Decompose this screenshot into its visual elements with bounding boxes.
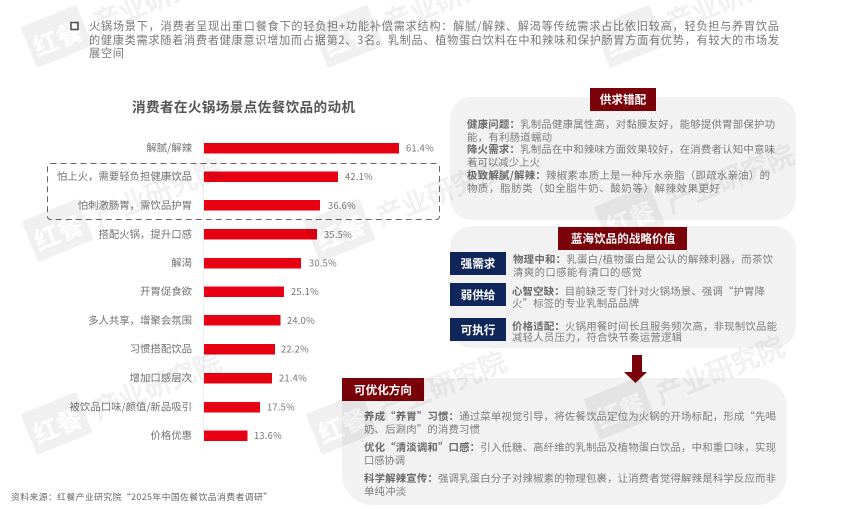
panel: blue ocean strategic value: 物理中和：乳蛋白/植物蛋白是公认的解辣利器，而茶饮: [513, 251, 774, 266]
watermarks: 产业研究院: [650, 325, 789, 412]
tag: weak supply: [450, 283, 506, 306]
bar chart: motivations: 价格优惠: [150, 427, 192, 442]
panel: optimization directions: 单纯冲淡: [364, 483, 407, 498]
bar chart: motivations: 13.6%: [254, 428, 282, 442]
watermarks: 红餐: [28, 206, 88, 258]
panel: optimization directions: [342, 378, 787, 505]
dashed highlight box: [48, 164, 440, 220]
watermarks: 产业研究院: [370, 147, 509, 234]
watermarks: 红餐: [590, 384, 650, 436]
bar chart: motivations: 增加口感层次: [130, 370, 192, 384]
source note: 资料来源：红餐产业研究院“2025年中国佐餐饮品消费者调研”: [11, 490, 272, 503]
watermarks: 红餐: [318, 12, 378, 64]
panel: blue ocean strategic value: 减轻人员压力，符合快节奏运营逻辑: [512, 329, 682, 344]
bar chart: motivations: 35.5%: [324, 227, 352, 241]
bar chart: motivations: 22.2%: [281, 342, 309, 356]
watermarks: 红餐: [27, 399, 87, 451]
heading: supply-demand mismatch: [590, 88, 656, 111]
panel: blue ocean strategic value: 清爽的口感能有清口的感觉: [513, 264, 642, 279]
tag: executable: [450, 318, 506, 341]
watermarks: 产业研究院: [660, 133, 799, 220]
heading: optimization directions: [342, 378, 424, 401]
bar chart: motivations: 17.5%: [267, 400, 295, 414]
bar chart: motivations: 习惯搭配饮品: [130, 340, 192, 356]
tag: weak supply: 弱供给: [461, 287, 496, 303]
watermarks: 产业研究院: [88, 147, 227, 234]
summary paragraph: [71, 18, 779, 61]
bar chart: motivations: 21.4%: [279, 370, 307, 384]
panel: optimization directions: 奶、后涮肉”的消费习惯: [364, 421, 480, 436]
watermarks: 红餐: [310, 206, 370, 258]
tag: strong demand: [450, 252, 506, 275]
panel: supply-demand mismatch: 极致解腻/解辣：辣椒素本质上是一种斥水亲脂（即疏水亲油）的: [467, 167, 770, 182]
summary paragraph: 火锅场景下，消费者呈现出重口餐食下的轻负担+功能补偿需求结构：解腻/解辣、解渴等传统需求占比依旧较高，轻负担与养胃饮品: [89, 18, 779, 34]
tag: strong demand: 强需求: [461, 256, 496, 272]
panel: optimization directions: 优化“清淡调和”口感：引入低糖、高纤维的乳制品及植物蛋白饮品，中和重口味，实现: [364, 439, 776, 454]
panel: supply-demand mismatch: 物质，脂肪类（如全脂牛奶、酸奶等）解辣效果更好: [467, 180, 720, 195]
watermarks: 红餐: [600, 12, 660, 64]
panel: supply-demand mismatch: 着可以减少上火: [467, 154, 540, 169]
heading: strategic value: 蓝海饮品的战略价值: [571, 230, 676, 246]
bar chart: motivations: 多人共享，增聚会氛围: [88, 312, 192, 327]
heading: optimization directions: 可优化方向: [354, 382, 412, 398]
panel: blue ocean strategic value: [450, 226, 796, 348]
watermarks: 产业研究院: [87, 340, 226, 427]
bar chart: motivations: 30.5%: [309, 256, 337, 270]
panel: supply-demand mismatch: 能，有利肠道蠕动: [467, 129, 552, 144]
watermarks: 红餐: [312, 399, 372, 451]
panel: optimization directions: 养成“养胃”习惯：通过菜单视觉引导，将佐餐饮品定位为火锅的开场标配，形成“先喝: [364, 408, 776, 423]
watermarks: 红餐: [600, 192, 660, 244]
heading: supply-demand mismatch: 供求错配: [600, 92, 647, 108]
tag: executable: 可执行: [461, 322, 496, 338]
watermarks: 红餐: [27, 12, 87, 64]
bar chart: motivations: 42.1%: [345, 169, 373, 183]
panel: blue ocean strategic value: 价格适配：火锅用餐时间长且服务频次高，非现制饮品能: [512, 318, 777, 333]
panel: optimization directions: 口感协调: [364, 452, 405, 467]
bar chart: motivations: 怕上火，需要轻负担健康饮品: [57, 168, 192, 183]
bar chart: motivations: 被饮品口味/颜值/新品吸引: [70, 398, 192, 414]
bar chart: motivations: 解腻/解辣: [146, 140, 193, 154]
panel: optimization directions: 科学解辣宣传：强调乳蛋白分子对辣椒素的物理包裹，让消费者觉得解辣是科学反应而非: [364, 470, 776, 485]
panel: supply-demand mismatch: [450, 88, 796, 220]
bar chart: motivations: 开胃促食欲: [140, 283, 192, 298]
bar chart: motivations: 61.4%: [406, 140, 434, 154]
panel: blue ocean strategic value: 火”标签的专业乳制品品牌: [512, 295, 639, 310]
bar chart: motivations: 25.1%: [291, 284, 319, 298]
bar chart: motivations: 36.6%: [328, 198, 356, 212]
panel: blue ocean strategic value: 心智空缺：目前缺乏专门针对火锅场景、强调“护胃降: [512, 283, 766, 298]
bar chart: motivations: 解渴: [171, 254, 192, 270]
icon: square bullet: [71, 22, 78, 30]
bar chart: motivations: [57, 135, 434, 450]
summary paragraph: 展空间: [89, 45, 124, 61]
bar chart: motivations: 搭配火锅，提升口感: [98, 226, 192, 241]
chart title: 消费者在火锅场景点佐餐饮品的动机: [132, 96, 355, 116]
bar chart: motivations: 24.0%: [287, 313, 315, 327]
panel: supply-demand mismatch: 健康问题：乳制品健康属性高，对黏膜友好，能够提供胃部保护功: [467, 116, 775, 131]
heading: strategic value: [558, 227, 687, 250]
panel: supply-demand mismatch: 降火需求：乳制品在中和辣味方面效果较好，在消费者认知中意味: [467, 141, 775, 156]
bar chart: motivations: 怕刺激肠胃，需饮品护胃: [78, 197, 192, 212]
summary paragraph: 的健康类需求随着消费者健康意识增加而占据第2、3名。乳制品、植物蛋白饮料在中和辣味和保护肠胃方面有优势，有较大的市场发: [89, 32, 779, 48]
watermarks: 产业研究院: [372, 340, 511, 427]
arrow: down: [624, 355, 647, 383]
